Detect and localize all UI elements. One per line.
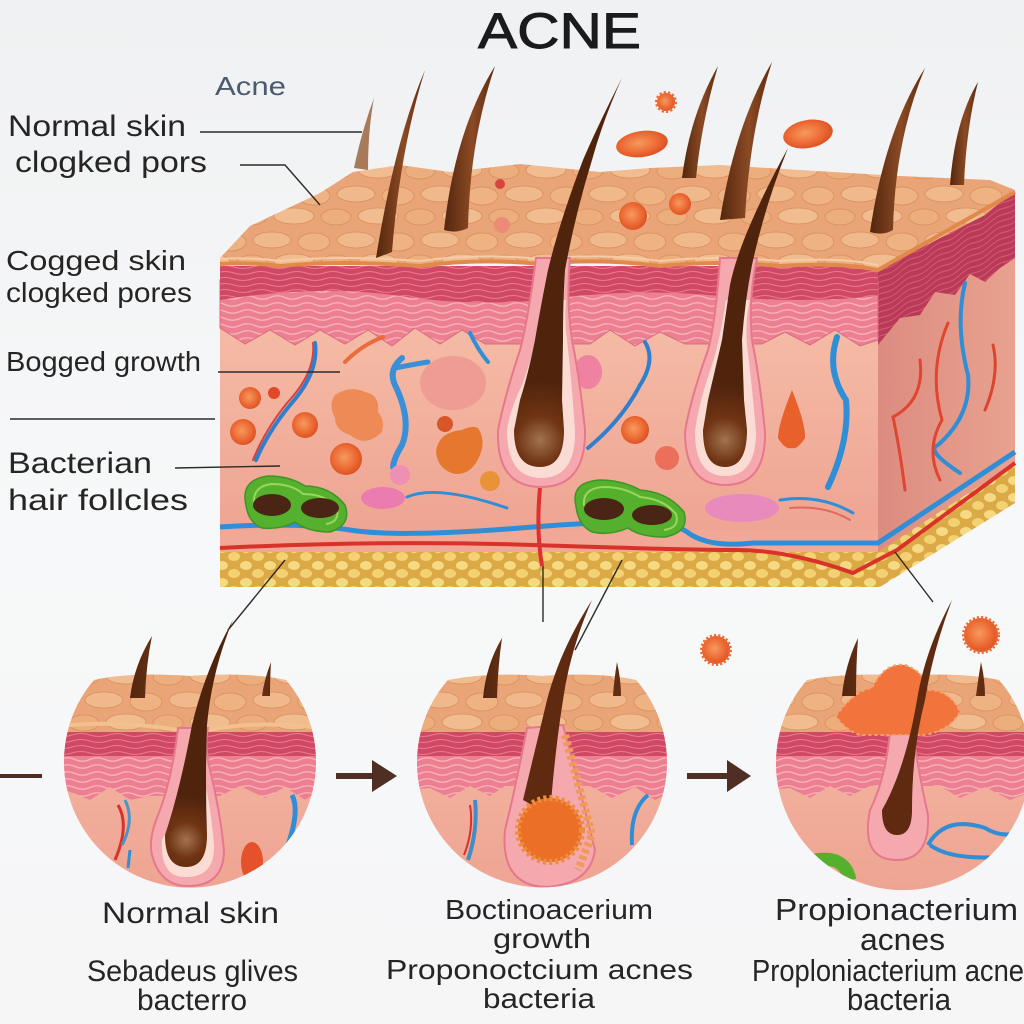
top skin surface	[220, 164, 1015, 270]
caption: bacterium growth	[386, 894, 693, 1014]
left labels	[6, 110, 207, 517]
hair follicle: large centre	[498, 78, 622, 487]
stage 1: normal skin circle	[60, 620, 320, 900]
front red epidermis band	[220, 266, 878, 303]
left labels: clogked pores	[6, 277, 192, 308]
title: ACNE	[478, 3, 641, 59]
hair follicle: right	[685, 148, 788, 485]
stage 3: propionibacterium acnes circle	[770, 600, 1024, 900]
front dermis	[220, 280, 878, 545]
caption: propionibacterium acnes: bacteria	[847, 982, 952, 1017]
arrow 3	[687, 760, 751, 792]
caption: bacterium growth: growth	[493, 923, 591, 954]
main skin cross-section	[220, 62, 1015, 587]
sebaceous glands and bacteria	[230, 93, 835, 522]
left labels: Normal skin	[8, 110, 186, 143]
caption: normal skin: bacterro	[137, 984, 247, 1017]
caption: normal skin	[87, 897, 298, 1017]
caption: normal skin: Normal skin	[102, 897, 279, 930]
pale band under the vessel	[220, 530, 878, 552]
stage 2: bacterium growth circle	[410, 600, 675, 900]
left labels: hair follcles	[8, 484, 188, 517]
arrow 2	[336, 760, 397, 792]
caption: propionibacterium acnes	[752, 892, 1024, 1017]
green glands	[245, 476, 685, 537]
caption: normal skin: Sebadeus glives	[87, 955, 298, 988]
caption: propionibacterium acnes: Propionacterium	[775, 892, 1018, 927]
left labels: clogked pors	[15, 146, 207, 179]
orange bacterial mass	[836, 665, 960, 735]
caption: bacterium growth: Proponoctcium acnes	[386, 954, 693, 985]
dermis blue and red vessels	[253, 283, 995, 520]
surface hairs	[354, 62, 978, 258]
floating bacteria	[702, 618, 998, 664]
caption: propionibacterium acnes: acnes	[860, 922, 945, 957]
front pale scalloped layer	[220, 280, 878, 346]
fat layer	[220, 463, 1015, 587]
left labels: Cogged skin	[6, 245, 186, 276]
arrow 1	[0, 774, 42, 778]
caption: bacterium growth: Boctinoacerium	[445, 894, 653, 925]
caption: bacterium growth: bacteria	[483, 983, 595, 1014]
left labels: Bogged growth	[6, 346, 201, 377]
leader lines	[10, 132, 933, 650]
right side face	[878, 190, 1015, 552]
left labels: Bacterian	[8, 447, 152, 480]
vessels along the base	[220, 452, 1015, 544]
label: Acne: Acne	[215, 71, 286, 101]
